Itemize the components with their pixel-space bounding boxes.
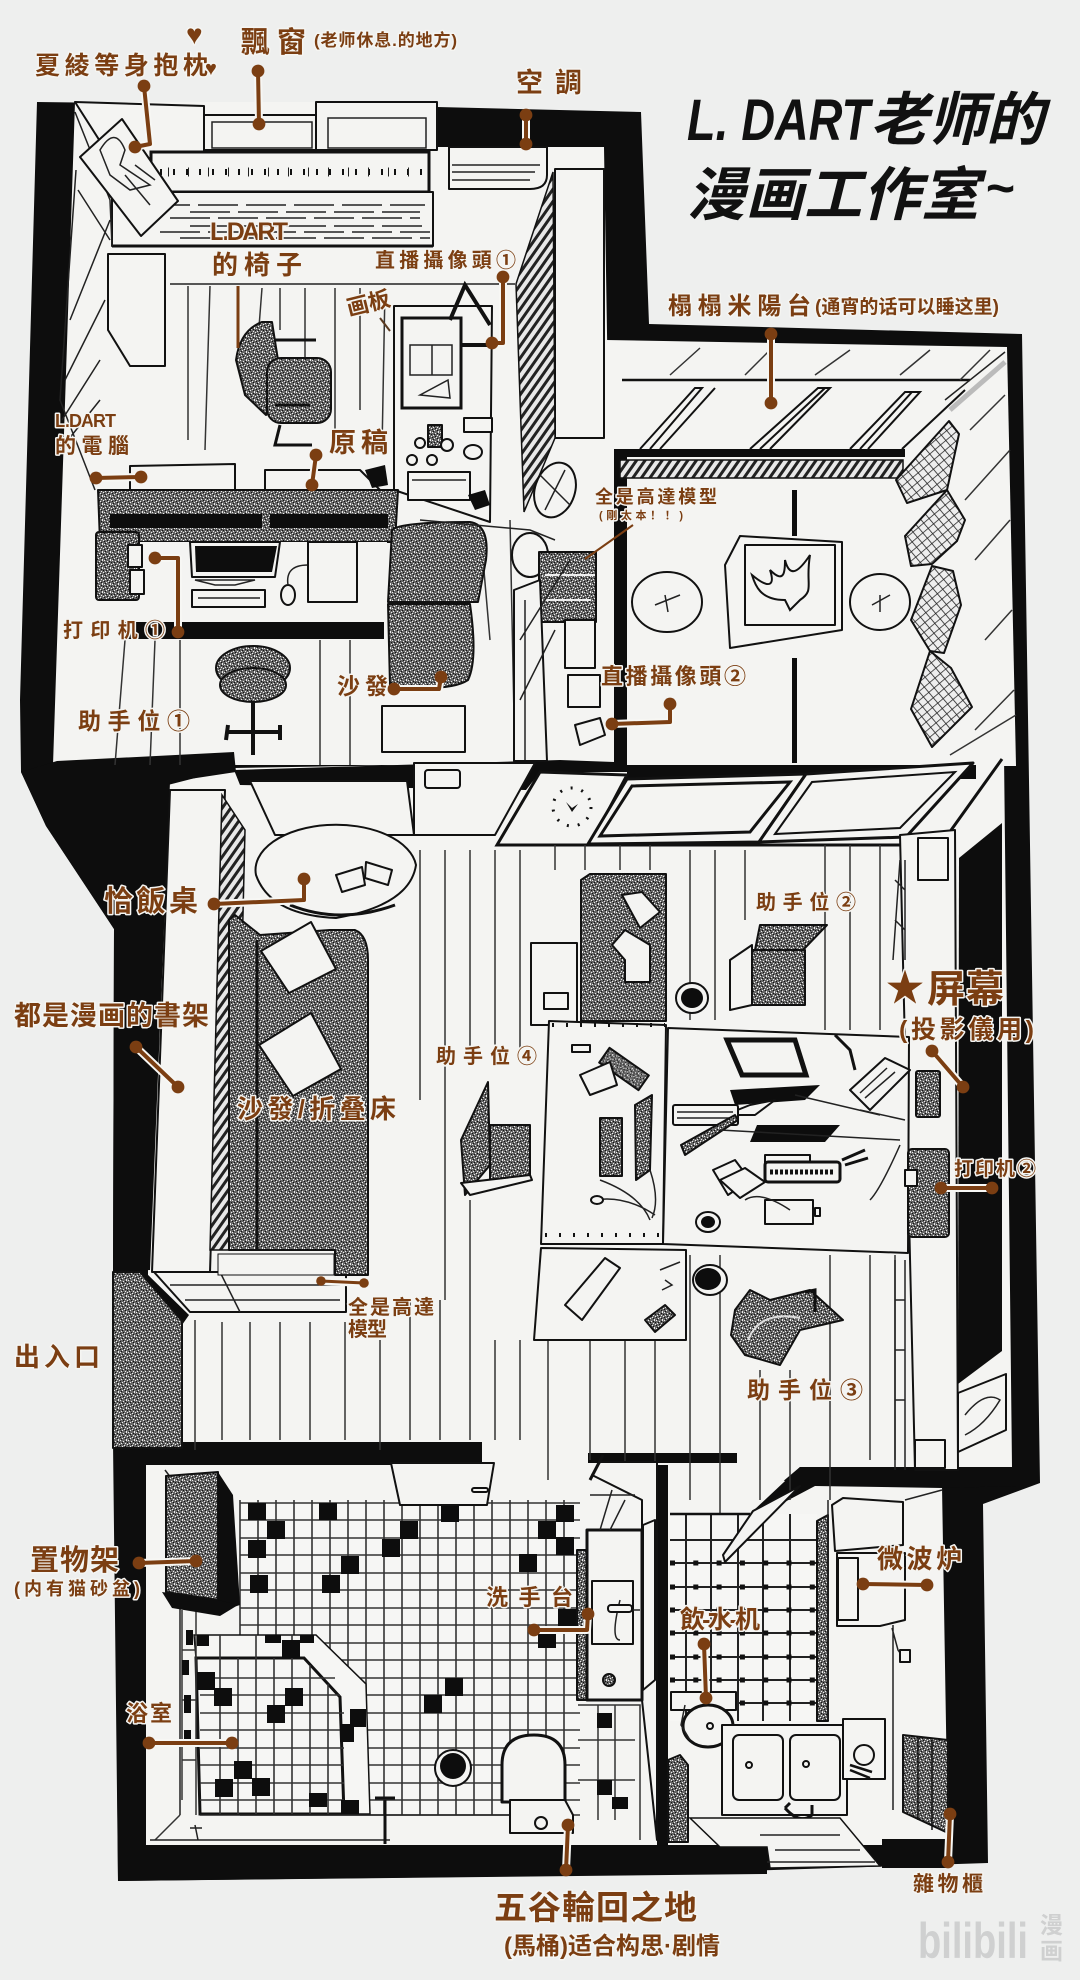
room 1: bay window bbox=[60, 102, 515, 490]
floor drain bbox=[435, 1750, 471, 1786]
labels: room 1: L.DART bbox=[210, 218, 288, 246]
bathroom tiled floor bbox=[240, 1500, 580, 1815]
entry step bbox=[690, 1818, 880, 1868]
toilet bbox=[502, 1735, 573, 1833]
labels: main room: (投影儀用) bbox=[899, 1016, 1034, 1044]
labels: bathroom and kitchen: (馬桶)适合构思·剧情 bbox=[504, 1933, 720, 1960]
labels: room 1 bbox=[35, 19, 582, 734]
side storage box bbox=[108, 254, 165, 366]
balcony tea table bbox=[725, 536, 842, 648]
L.DART's chair bbox=[236, 322, 331, 445]
icon: body pillow bbox=[80, 119, 178, 236]
balcony windows bbox=[620, 348, 1016, 763]
water dispenser bbox=[671, 1692, 736, 1747]
right wall cabinet, projection screen and poster bbox=[893, 823, 1006, 1470]
title: ~ bbox=[985, 160, 1014, 216]
labels: bathroom and kitchen: 置物架 bbox=[30, 1544, 119, 1577]
labels: main room: 助手位④ bbox=[436, 1044, 537, 1068]
air conditioner and hatched bookcase bbox=[449, 147, 604, 512]
labels: room 1: ♥ bbox=[186, 19, 203, 50]
title: 老师的 bbox=[870, 88, 1051, 153]
labels: main room bbox=[14, 885, 1036, 1403]
floorboards room 1 bbox=[115, 286, 515, 765]
bottom left table bbox=[534, 1248, 686, 1340]
labels: bathroom and kitchen: (内有猫砂盆) bbox=[14, 1579, 140, 1599]
labels: main room: 助手位② bbox=[756, 890, 856, 914]
wall vent and pipes bbox=[190, 1463, 494, 1844]
fan and gundam shelf bbox=[420, 457, 605, 761]
labels: main room: 全是高達 bbox=[348, 1295, 434, 1319]
labels: balcony: (剛太本！！) bbox=[599, 508, 683, 522]
labels: main room: 助手位③ bbox=[747, 1377, 863, 1403]
labels: balcony bbox=[595, 292, 999, 689]
labels: main room: 恰飯桌 bbox=[104, 885, 198, 918]
assistant seat stool 1 bbox=[216, 646, 290, 755]
labels: room 1: ♥ bbox=[205, 58, 217, 80]
assistant seat 2 chair bbox=[730, 925, 827, 1010]
labels: room 1: 的椅子 bbox=[212, 250, 302, 280]
labels: room 1: 空調 bbox=[516, 68, 582, 98]
balcony folding screen bbox=[896, 421, 972, 747]
washing sink bbox=[722, 1719, 885, 1819]
watermark: bilibili manga: bilibili bbox=[918, 1913, 1028, 1969]
labels: balcony: (通宵的话可以睡这里) bbox=[815, 295, 999, 318]
labels: bathroom and kitchen: 飲-水-机 bbox=[680, 1606, 760, 1634]
assistant seat 4 chair bbox=[461, 1082, 532, 1195]
entrance door bbox=[113, 1272, 182, 1448]
labels: balcony: 直播攝像頭② bbox=[601, 664, 746, 689]
labels: main room: 都是漫画的書架 bbox=[14, 1001, 209, 1031]
dining table bbox=[256, 825, 416, 918]
sofa bed bbox=[218, 915, 368, 1275]
printer 1 bbox=[96, 532, 144, 600]
labels: room 1: 画板 bbox=[344, 286, 393, 321]
labels: main room: 模型 bbox=[348, 1318, 387, 1341]
labels: room 1: (老师休息.的地方) bbox=[314, 30, 457, 50]
watermark: bilibili manga: 画 bbox=[1040, 1938, 1063, 1964]
labels: room 1: 打印机① bbox=[63, 619, 165, 642]
labels: balcony: 榻榻米陽台 bbox=[668, 292, 811, 320]
sofa bbox=[382, 522, 487, 752]
balcony bottom rail bbox=[627, 765, 976, 779]
labels: bathroom and kitchen: 浴室 bbox=[126, 1701, 172, 1726]
drawing desk and tablet bbox=[394, 285, 492, 522]
manga bookshelf bbox=[152, 790, 346, 1312]
bathroom shelving cabinet bbox=[162, 1472, 240, 1616]
labels: room 1: 原稿 bbox=[329, 428, 388, 458]
wash basin unit bbox=[577, 1455, 657, 1840]
storage cabinet bbox=[903, 1735, 948, 1833]
labels: room 1: 直播攝像頭① bbox=[375, 249, 516, 272]
balcony cushions bbox=[632, 572, 910, 632]
labels: bathroom and kitchen: 雜物櫃 bbox=[913, 1872, 983, 1896]
labels: bathroom and kitchen: 微波炉 bbox=[877, 1544, 962, 1574]
labels: room 1: L.DART bbox=[55, 411, 116, 431]
assistant seat 3 chair bbox=[731, 1290, 843, 1365]
assistant tables with computers bbox=[541, 1021, 910, 1253]
labels: bathroom and kitchen: 洗手台 bbox=[486, 1585, 573, 1610]
assistant desk with dark top bbox=[531, 874, 666, 1025]
shower area tiles bbox=[150, 1470, 570, 1840]
labels: main room: 沙發/折叠床 bbox=[237, 1094, 396, 1124]
main room floorboards bbox=[195, 845, 905, 1520]
labels: room 1: 助手位① bbox=[78, 708, 190, 734]
black cup bbox=[676, 983, 708, 1013]
labels: main room: 打印机② bbox=[954, 1158, 1036, 1180]
labels: main room: 出入口 bbox=[14, 1342, 100, 1372]
labels: main room: 屏幕 bbox=[927, 969, 1004, 1011]
long desk with monitors bbox=[98, 464, 398, 639]
printers 2 bbox=[905, 1071, 949, 1237]
labels: main room: ★ bbox=[886, 968, 924, 1010]
gray laundry box bbox=[668, 1755, 688, 1842]
callout lines bbox=[96, 71, 992, 1870]
main room windows and clock bbox=[250, 759, 1002, 845]
labels: bathroom and kitchen bbox=[14, 1544, 983, 1960]
labels: bathroom and kitchen: 五谷輪回之地 bbox=[494, 1889, 697, 1926]
title: L. DART bbox=[687, 88, 874, 153]
labels: balcony: 全是高達模型 bbox=[595, 486, 717, 507]
labels: room 1: 飄窗 bbox=[241, 26, 306, 59]
labels: room 1: 沙發 bbox=[337, 673, 388, 699]
title: 漫画工作室 bbox=[687, 163, 987, 228]
kitchen tiled wall bbox=[670, 1486, 828, 1721]
labels: room 1: 的電腦 bbox=[55, 435, 129, 458]
title bbox=[687, 88, 1051, 228]
black cup 2 bbox=[693, 1265, 727, 1295]
labels: room 1: 夏綾等身抱枕 bbox=[35, 52, 208, 80]
microwave and cabinets bbox=[828, 1490, 942, 1810]
watermark: bilibili manga: 漫 bbox=[1040, 1912, 1063, 1938]
